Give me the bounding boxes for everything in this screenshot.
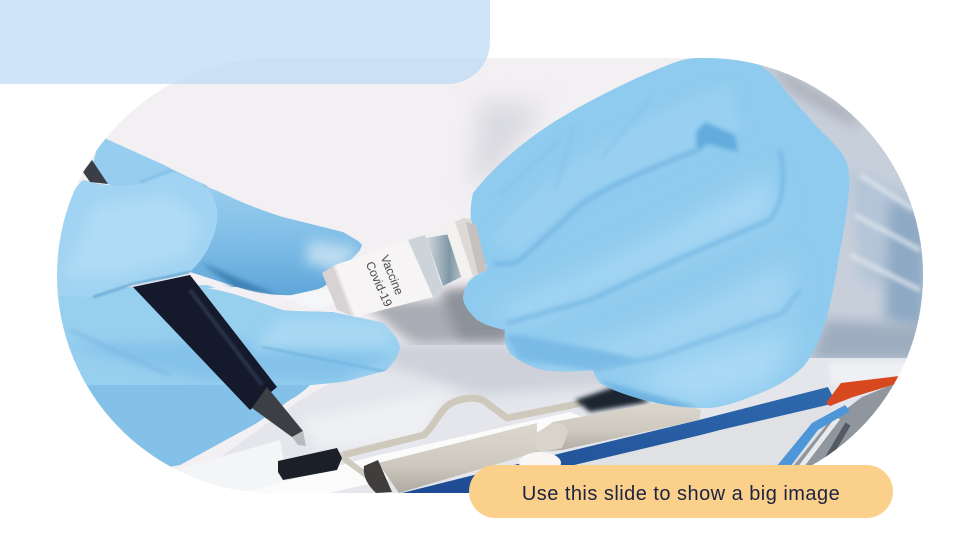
top finger behind thumb [93,138,184,186]
vaccine vial [322,218,487,317]
thumb wrinkles [604,152,607,156]
white paper under clip [288,412,581,493]
photo: gloved hands holding a vaccine vial [40,50,930,493]
right gloved hand [455,50,855,415]
decorative top-left band [0,0,490,84]
plaid sleeve [755,60,930,362]
lower palm [86,383,318,467]
glove highlight: knuckle [630,330,800,405]
vial label text [367,254,402,306]
finger folds [493,150,697,264]
vial cap [445,218,487,280]
desk surface [170,343,930,493]
caption pill [469,465,893,518]
dark shadow under hand [575,385,650,412]
pen [83,160,306,446]
black block [278,448,342,480]
glove highlight: third finger [586,267,793,358]
strip between fingers [283,289,338,309]
white ball [519,452,561,465]
lower finger [40,285,405,385]
scissors [776,376,899,470]
desk lower right [574,404,828,465]
clipboard clip [278,385,701,493]
photo background: white coat [76,58,693,470]
vial label text: Vaccine [378,253,406,297]
glove highlight: thumb [503,95,732,246]
roller bar left [378,423,537,493]
second finger behind thumb [190,180,365,297]
thumb [57,170,218,296]
glove highlight: second finger [490,175,775,322]
caption pill: Use this slide to show a big image [522,483,840,505]
left gloved hand [57,138,400,467]
wire clip [343,398,582,455]
clipboard edge [402,387,836,493]
hollow between fingers [696,122,738,152]
lower hand shading [505,335,640,370]
roller bar right [537,400,701,452]
vial label text: Covid-19 [363,259,395,309]
